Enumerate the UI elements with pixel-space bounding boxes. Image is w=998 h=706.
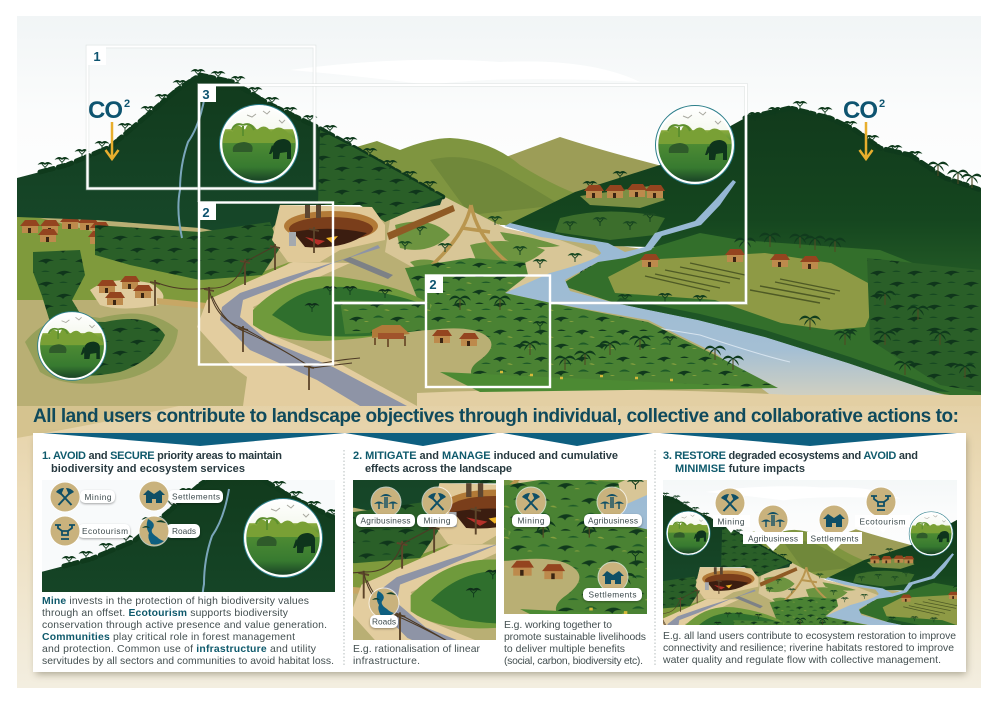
panel 2 heading — [353, 450, 618, 475]
icon: ecotourism: Ecotourism — [860, 516, 906, 526]
CO2 label left: CO — [88, 97, 123, 124]
panel 1 heading: 1. AVOID and SECURE priority areas to maintain — [42, 450, 282, 462]
panel 3 image — [663, 480, 957, 625]
mine — [272, 205, 385, 262]
CO2 label left: 2 — [124, 98, 130, 110]
panel 2 left caption — [353, 644, 481, 667]
background sand — [17, 388, 981, 688]
icon: settlements — [583, 562, 642, 601]
left mountain — [17, 69, 443, 280]
panel 2 right caption: E.g. working together to — [504, 620, 612, 631]
icon: mining — [713, 488, 750, 533]
power lines — [150, 227, 360, 390]
panel 2 left caption: E.g. rationalisation of linear — [353, 644, 481, 655]
icon: roads: Roads — [372, 616, 396, 626]
panel 3 heading — [663, 450, 918, 475]
habitat circle: upper left — [220, 104, 298, 184]
far hills — [353, 137, 662, 228]
panel 1 body text: and protection. Common use of infrastructure and utility — [42, 644, 317, 655]
habitat circle: lower left — [38, 312, 106, 380]
ground — [17, 212, 981, 406]
icon: agribusiness — [584, 486, 642, 527]
tag 2 right — [427, 276, 443, 293]
icon: settlements — [807, 504, 862, 551]
panel 2 right caption: promote sustainable livelihoods — [504, 632, 646, 643]
stilt house — [372, 325, 410, 347]
icon: roads — [138, 516, 200, 546]
tag 2 right: 2 — [429, 277, 437, 292]
icon: mining: Mining — [84, 492, 112, 502]
panel 2 heading: 2. MITIGATE and MANAGE induced and cumulative — [353, 450, 618, 462]
right valley floor and field — [560, 184, 981, 400]
panel 1 body text — [42, 596, 334, 667]
chevron banner — [43, 433, 957, 446]
right mountain and valley forest — [505, 101, 983, 310]
river — [505, 180, 981, 406]
frame 2 left — [199, 202, 333, 364]
icon: mining — [50, 482, 115, 512]
tan corner under the landscape — [17, 400, 205, 438]
panel 1 body text: Mine invests in the protection of high biodiversity values — [42, 596, 309, 607]
panel 1 image — [42, 480, 335, 592]
panel 1 body text: conservation through active presence and value generation. — [42, 620, 327, 631]
panel 3 caption — [662, 631, 956, 666]
main heading: All land users contribute to landscape objectives through individual, collective and collaborative actions to: — [33, 406, 959, 427]
central forest — [405, 258, 778, 392]
icon: agribusiness: Agribusiness — [360, 516, 410, 526]
icon: agribusiness: Agribusiness — [748, 534, 798, 544]
icon: roads: Roads — [172, 526, 196, 536]
icon: settlements: Settlements — [588, 590, 636, 600]
icon: agribusiness: Agribusiness — [588, 516, 638, 526]
sky — [17, 16, 981, 256]
panel 3: restore — [663, 451, 957, 665]
icon: settlements: Settlements — [810, 534, 858, 544]
CO2 label right: 2 — [879, 98, 885, 110]
central clearing with tracks — [385, 197, 602, 292]
icon: mining: Mining — [518, 516, 545, 526]
tag 1: 1 — [93, 49, 101, 64]
panel 1 heading: biodiversity and ecosystem services — [51, 463, 245, 475]
tag 3: 3 — [202, 87, 210, 102]
panel 2 right caption — [504, 620, 646, 667]
habitat circle: upper right — [656, 106, 734, 184]
tag 2 left — [200, 203, 216, 220]
panel 2 right caption: to deliver multiple benefits — [504, 644, 625, 655]
panel 3 caption: water quality and regulate flow with collective management. — [662, 655, 941, 666]
panel 3 heading: MINIMISE future impacts — [675, 463, 805, 475]
panel 1 body text: Communities play critical role in forest management — [42, 632, 295, 643]
road — [197, 205, 455, 406]
panel 1: avoid and secure — [42, 451, 335, 666]
CO2 arrow left — [106, 122, 118, 159]
icon: settlements: Settlements — [172, 492, 220, 502]
panel 3 caption: E.g. all land users contribute to ecosystem restoration to improve — [663, 631, 956, 642]
frame 1 — [88, 46, 314, 188]
icon: settlements — [138, 480, 223, 512]
icon: roads — [368, 588, 400, 628]
CO2 arrow right — [860, 122, 872, 159]
panel 1 body text: through an offset. Ecotourism supports biodiversity — [42, 608, 289, 619]
panel 2 right caption: (social, carbon, biodiversity etc). — [504, 656, 643, 667]
panel 2 left image — [353, 480, 496, 640]
frame 2 right — [426, 276, 550, 387]
icon: mining — [512, 486, 550, 527]
panel shadow — [36, 438, 966, 674]
icon: mining: Mining — [718, 516, 745, 526]
tag 1 — [88, 47, 106, 65]
panel 2 heading: effects across the landscape — [365, 463, 512, 475]
icon: ecotourism — [855, 486, 910, 533]
icon: mining — [417, 486, 457, 527]
panel 1 heading — [42, 450, 282, 475]
panel 3 heading: 3. RESTORE degraded ecosystems and AVOID and — [663, 450, 918, 462]
tag 3 — [200, 86, 216, 102]
panel 2 left caption: infrastructure. — [353, 656, 420, 667]
panel 1 body text: servitudes by all sectors and communities to avoid habitat loss. — [42, 656, 334, 667]
main white panel — [33, 433, 966, 672]
frame 3 — [199, 85, 746, 303]
CO2 label right: CO — [843, 97, 878, 124]
landscape illustration — [17, 16, 983, 406]
panel 3 caption: connectivity and resilience; riverine habitats restored to improve — [663, 643, 954, 654]
icon: agribusiness — [356, 486, 415, 527]
icon: ecotourism — [50, 516, 130, 546]
tag 2 left: 2 — [202, 205, 210, 220]
icon: mining: Mining — [424, 516, 451, 526]
left ground greens — [17, 212, 290, 384]
panel 2: mitigate and manage — [353, 451, 647, 666]
sand strip above the heading — [417, 389, 981, 406]
icon: agribusiness — [743, 504, 803, 551]
icon: ecotourism: Ecotourism — [82, 526, 128, 536]
panel 2 right image — [504, 480, 647, 614]
